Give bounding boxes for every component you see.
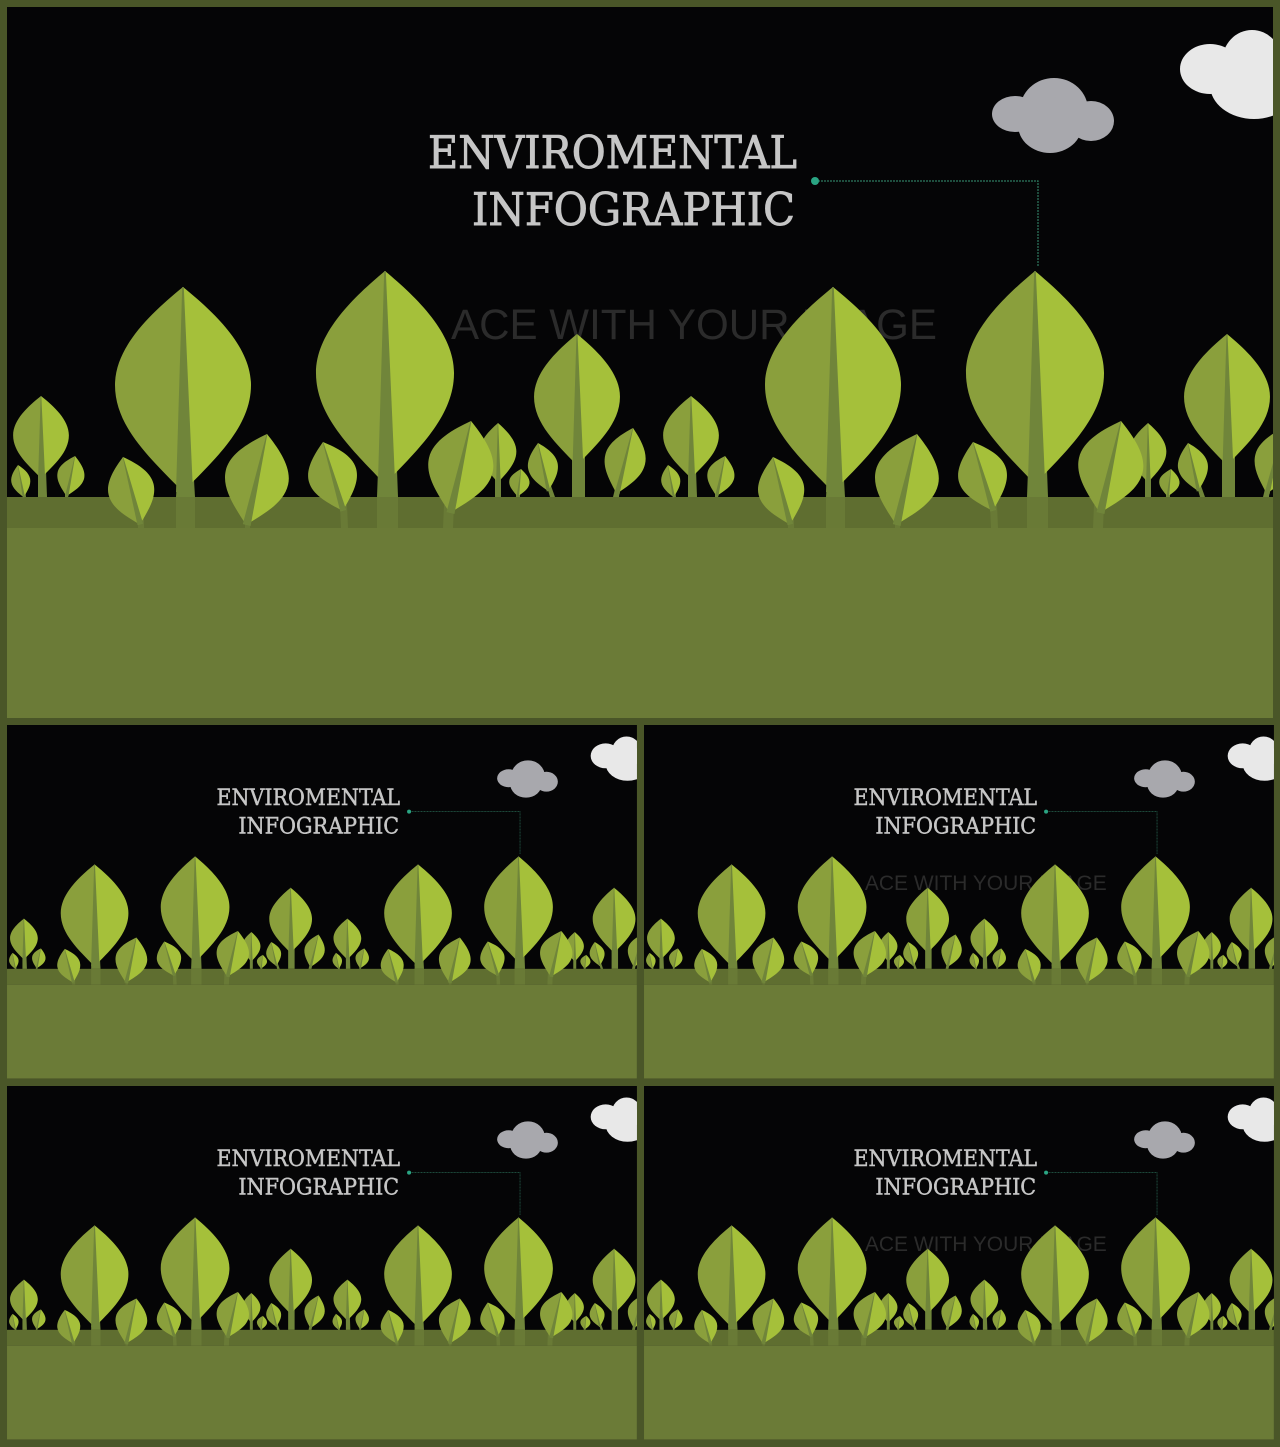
panel: small slide bottom right — [644, 1086, 1280, 1440]
connector line — [811, 177, 1038, 266]
connector line — [1044, 1171, 1157, 1215]
title — [430, 134, 796, 226]
connector line — [407, 810, 520, 854]
ground and leaf plants — [644, 856, 1280, 1079]
sky and clouds — [7, 1086, 649, 1440]
panel: small slide bottom left — [7, 1086, 652, 1440]
title — [854, 1149, 1037, 1195]
panel: small slide top right — [644, 725, 1280, 1079]
panel: main slide — [7, 7, 1280, 718]
placeholder text: ACE WITH YOUR IMAGE — [451, 301, 937, 349]
ground and leaf plants — [644, 1217, 1280, 1440]
sky and clouds — [644, 1086, 1280, 1440]
title: INFOGRAPHIC — [238, 1174, 399, 1200]
title: ENVIROMENTAL — [428, 126, 797, 179]
title: INFOGRAPHIC — [875, 813, 1036, 839]
sky and clouds — [7, 7, 1273, 497]
title: ENVIROMENTAL — [853, 1146, 1037, 1172]
ground and leaf plants — [7, 271, 1280, 718]
connector line — [1044, 810, 1157, 854]
title: ENVIROMENTAL — [853, 785, 1037, 811]
title: INFOGRAPHIC — [238, 813, 399, 839]
placeholder text: ACE WITH YOUR IMAGE — [865, 1232, 1107, 1256]
title — [854, 788, 1037, 834]
title: INFOGRAPHIC — [875, 1174, 1036, 1200]
ground and leaf plants — [7, 1217, 652, 1440]
panel: small slide top left — [7, 725, 652, 1079]
title: INFOGRAPHIC — [472, 183, 795, 236]
title — [217, 788, 400, 834]
title: ENVIROMENTAL — [216, 1146, 400, 1172]
placeholder text: ACE WITH YOUR IMAGE — [865, 871, 1107, 895]
title: ENVIROMENTAL — [216, 785, 400, 811]
ground and leaf plants — [7, 856, 652, 1079]
sky and clouds — [7, 725, 649, 1079]
connector line — [407, 1171, 520, 1215]
sky and clouds — [644, 725, 1280, 1079]
title — [217, 1149, 400, 1195]
